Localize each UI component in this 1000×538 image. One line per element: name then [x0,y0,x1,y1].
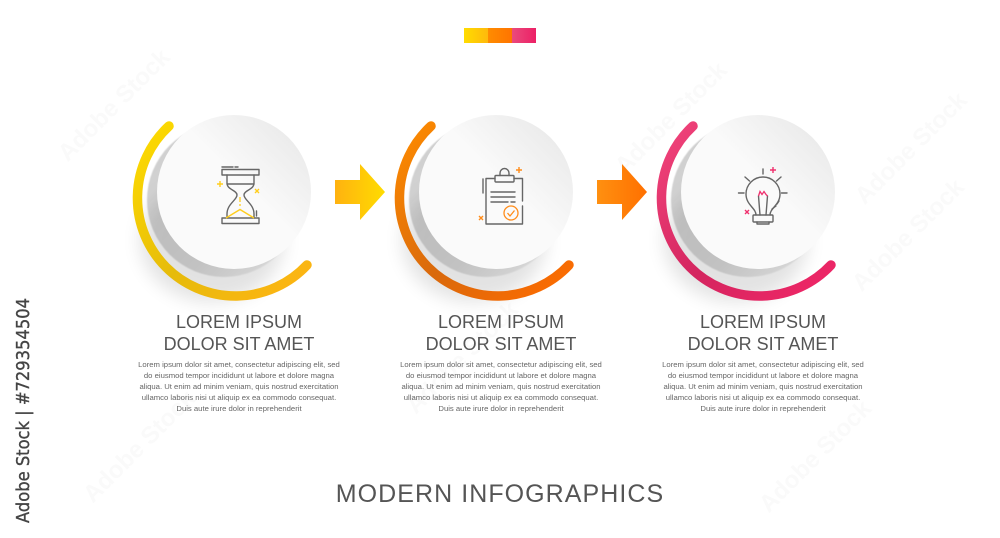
text block: step 3: do eiusmod tempor incididunt ut labore et dolore magna [668,371,859,380]
text block: step 2: aliqua. Ut enim ad minim veniam, quis nostrud exercitation [401,382,601,391]
text block: step 3 [662,312,864,413]
arrow 1 [335,164,385,220]
text block: step 2: LOREM IPSUM [438,312,564,332]
text block: step 1: Lorem ipsum dolor sit amet, consectetur adipiscing elit, sed [138,360,340,369]
text block: step 1 [138,312,340,413]
watermark id: Adobe Stock | #729354504 [14,298,34,523]
text: Adobe Stock [610,56,733,180]
text block: step 2: Lorem ipsum dolor sit amet, consectetur adipiscing elit, sed [400,360,602,369]
panel: step 1 circle [137,115,311,302]
text block: step 1: Duis aute irure dolor in reprehenderit [176,404,302,413]
text block: step 2: Duis aute irure dolor in reprehenderit [438,404,564,413]
title: MODERN INFOGRAPHICS [336,480,664,508]
text: Adobe Stock [53,43,176,167]
orange arc [399,126,569,296]
text block: step 3: ullamco laboris nisi ut aliquip ex ea commodo consequat. [666,393,860,402]
text block: step 3: aliqua. Ut enim ad minim veniam, quis nostrud exercitation [663,382,863,391]
yellow arc [137,126,307,296]
icon: hourglass [217,167,259,224]
text: Adobe Stock [850,86,973,210]
text block: step 2: DOLOR SIT AMET [426,334,576,354]
colour bar [464,28,536,43]
text: Adobe Stock [754,395,877,518]
pink arc [661,126,831,296]
text: Adobe Stock [78,385,201,508]
text block: step 3: DOLOR SIT AMET [688,334,838,354]
text block: step 1: ullamco laboris nisi ut aliquip ex ea commodo consequat. [142,393,336,402]
text block: step 2 [400,312,602,413]
text: Adobe Stock [847,173,970,297]
icon: clipboard [479,167,522,224]
text block: step 2: do eiusmod tempor incididunt ut labore et dolore magna [406,371,597,380]
text block: step 3: Duis aute irure dolor in reprehenderit [700,404,826,413]
icon: light bulb [738,167,787,224]
text block: step 1: DOLOR SIT AMET [164,334,314,354]
arrow 2 [597,164,647,220]
text block: step 1: do eiusmod tempor incididunt ut labore et dolore magna [144,371,335,380]
text block: step 1: LOREM IPSUM [176,312,302,332]
text: Adobe Stock [401,296,524,419]
text block: step 1: aliqua. Ut enim ad minim veniam, quis nostrud exercitation [139,382,339,391]
text block: step 3: Lorem ipsum dolor sit amet, consectetur adipiscing elit, sed [662,360,864,369]
text block: step 3: LOREM IPSUM [700,312,826,332]
text block: step 2: ullamco laboris nisi ut aliquip ex ea commodo consequat. [404,393,598,402]
panel: step 3 circle [661,115,835,302]
panel: step 2 circle [399,115,573,302]
